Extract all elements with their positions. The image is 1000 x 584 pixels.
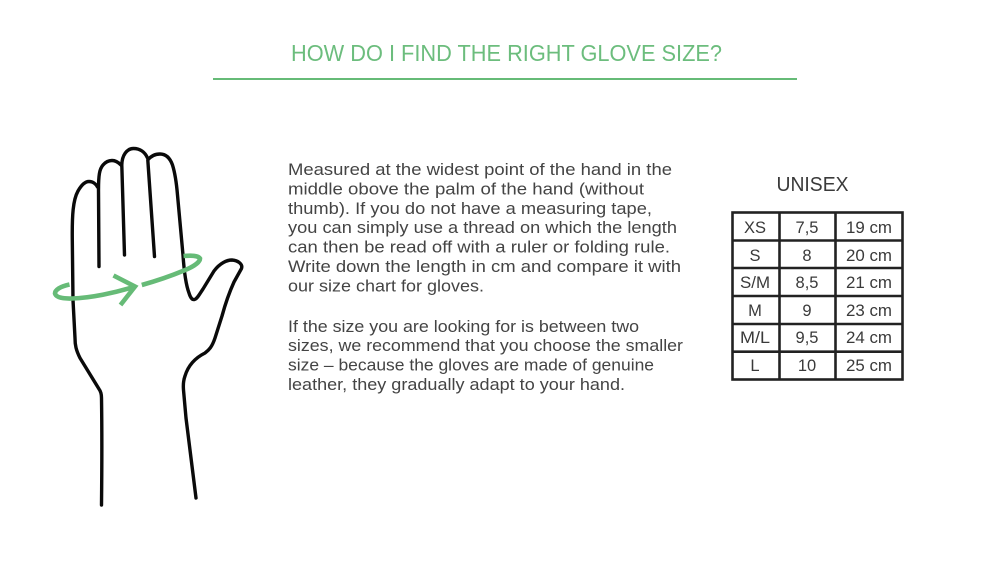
text block: measuring instructions: thumb). If you do not have a measuring tape, [288, 199, 652, 218]
row XS [744, 219, 892, 237]
row XS: XS [744, 219, 766, 237]
row S: 8 [802, 247, 812, 265]
row S: 20 cm [846, 247, 892, 265]
text block: measuring instructions: Measured at the widest point of the hand in the [288, 160, 672, 179]
row S/M: S/M [740, 274, 770, 292]
row L: 25 cm [846, 357, 892, 375]
row M [748, 302, 892, 320]
text block: measuring instructions: you can simply use a thread on which the length [288, 218, 677, 237]
row S/M: 21 cm [846, 274, 892, 292]
title: HOW DO I FIND THE RIGHT GLOVE SIZE? [291, 40, 722, 66]
row L: 10 [798, 357, 816, 375]
text block: measuring instructions: our size chart for gloves. [288, 276, 484, 296]
row S [749, 247, 892, 265]
row M: M [748, 302, 762, 320]
text block: size advice: size – because the gloves are made of genuine [288, 356, 654, 374]
table grid [732, 212, 902, 380]
hand outline [72, 148, 242, 505]
text block: size advice: sizes, we recommend that you choose the smaller [288, 336, 683, 355]
text block: size advice: If the size you are looking for is between two [288, 317, 639, 336]
row S/M [740, 274, 892, 292]
text block: size advice: leather, they gradually adapt to your hand. [288, 375, 625, 394]
row M: 9 [802, 302, 812, 320]
row M/L: 24 cm [846, 329, 892, 347]
row S: S [749, 247, 761, 265]
table heading: unisex: UNISEX [776, 174, 848, 196]
icon: hand with measuring tape [55, 148, 242, 505]
text block: measuring instructions: can then be read off with a ruler or folding rule. [288, 238, 670, 256]
text block: measuring instructions: Write down the length in cm and compare it with [288, 257, 681, 276]
row S/M: 8,5 [796, 274, 818, 292]
text block: size advice [288, 317, 683, 394]
text block: measuring instructions: middle obove the palm of the hand (without [288, 180, 644, 198]
row M/L: M/L [740, 329, 770, 347]
row M/L: 9,5 [796, 329, 818, 347]
row L [750, 357, 892, 375]
text block: measuring instructions [288, 160, 681, 296]
measuring tape arrow [55, 256, 200, 305]
size chart table [732, 212, 902, 380]
row L: L [750, 357, 760, 375]
row M: 23 cm [846, 302, 892, 320]
title underline [213, 78, 797, 80]
row XS: 19 cm [846, 219, 892, 237]
row XS: 7,5 [796, 219, 818, 237]
row M/L [740, 329, 892, 347]
